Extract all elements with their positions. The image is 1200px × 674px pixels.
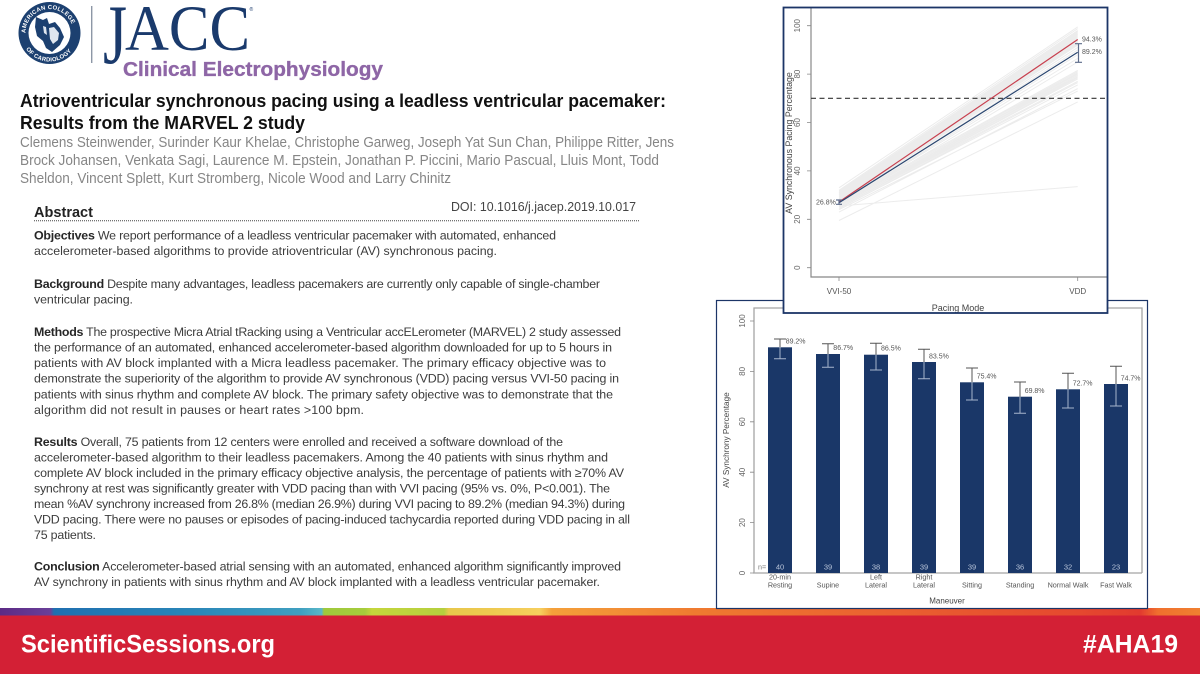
methods text: patients with sinus rhythm and complete AV block. The primary safety objective was to demonstrate that the (34, 387, 613, 401)
authors: Clemens Steinwender, Surinder Kaur Khelae, Christophe Garweg, Joseph Yat Sun Chan, Philippe Ritter, Jens (20, 135, 674, 151)
line chart y axis (784, 18, 1078, 281)
line chart x axis labels: Pacing Mode (932, 303, 984, 313)
maneuver labels (768, 572, 1132, 590)
mean line (839, 52, 1078, 203)
journal name: Clinical Electrophysiology (123, 59, 384, 81)
results text: synchrony at rest was significantly greater with VDD pacing than with VVI pacing (95% vs. 0%, P<0.001). The (34, 481, 610, 495)
sample size labels: 36 (1016, 562, 1024, 572)
abstract heading: Abstract (34, 204, 93, 221)
sample size labels: 39 (824, 562, 832, 572)
line value labels (816, 37, 1102, 207)
bar chart y axis: AV Synchrony Percentage (722, 392, 731, 488)
line chart x axis labels: VDD (1069, 287, 1086, 296)
line value labels: 89.2% (1082, 49, 1102, 56)
maneuver labels: Sitting (962, 580, 982, 590)
line value labels: 26.8% (816, 200, 836, 206)
line chart y axis: 60 (793, 118, 802, 127)
sample size labels: 40 (776, 562, 784, 572)
results text: Results Overall, 75 patients from 12 centers were enrolled and received a software download of the (34, 435, 563, 449)
bar value labels: 69.8% (1025, 388, 1045, 395)
results text (34, 435, 630, 542)
bar value labels: 72.7% (1073, 380, 1093, 388)
results text: 75 patients. (34, 528, 96, 542)
bar chart y axis: 100 (738, 314, 747, 328)
sample size labels: 39 (968, 562, 976, 572)
line chart y axis: 80 (793, 69, 802, 79)
authors: Sheldon, Vincent Splett, Kurt Stromberg, Nicole Wood and Larry Chinitz (20, 171, 451, 187)
line chart y axis: 40 (793, 166, 802, 175)
sample size labels: n= (758, 562, 766, 572)
bar chart x axis title: Maneuver (929, 596, 965, 606)
methods text (34, 325, 621, 417)
results text: accelerometer-based algorithm to their leadless pacemakers. Among the 40 patients with sinus rhythm and (34, 451, 608, 465)
conclusion text (34, 559, 621, 589)
background text (34, 277, 600, 306)
ACC seal logo: OF CARDIOLOGY (26, 48, 70, 62)
methods text: demonstrate the superiority of the algorithm to provide AV synchronous (VDD) pacing versus VVI-50 pacing in (34, 372, 619, 386)
authors: Brock Johansen, Venkata Sagi, Laurence M. Epstein, Jonathan P. Piccini, Mario Pascual, Lluis Mont, Todd (20, 153, 659, 169)
bar value labels: 74.7% (1121, 376, 1141, 382)
maneuver labels: Resting (768, 580, 792, 590)
article title: Results from the MARVEL 2 study (20, 113, 305, 133)
line chart y axis: AV Synchronous Pacing Percentage (784, 72, 794, 214)
error bars (836, 44, 1082, 204)
ACC seal logo: AMERICAN COLLEGE (22, 4, 76, 33)
median line (839, 40, 1078, 202)
line chart y axis: 100 (793, 18, 802, 32)
bars (768, 347, 1128, 573)
conclusion text: AV synchrony in patients with sinus rhythm and AV block implanted with a leadless ventricular pacemaker. (34, 575, 600, 589)
background text: Background Despite many advantages, leadless pacemakers are currently only capable of single-chamber (34, 277, 600, 291)
objectives text: accelerometer-based algorithms to provide atrioventricular (AV) synchronous pacing. (34, 244, 497, 258)
JACC wordmark: ® (250, 6, 254, 13)
methods text: the performance of an automated, enhanced accelerometer-based algorithm downloaded for up to 5 hours in (34, 340, 612, 354)
bar chart y axis: 60 (738, 417, 747, 426)
bar value labels: 83.5% (929, 354, 949, 360)
maneuver labels: Lateral (865, 580, 887, 590)
line chart y axis: 0 (793, 265, 802, 270)
70 percent threshold line (811, 97, 1107, 99)
bar value labels: 86.5% (881, 346, 901, 352)
error bars above bars (774, 339, 1122, 397)
methods text: Methods The prospective Micra Atrial tRacking using a Ventricular accELerometer (MARVEL) 2 study assessed (34, 325, 621, 339)
JACC wordmark (103, 0, 254, 82)
footer band (0, 608, 1200, 674)
methods text: algorithm did not result in pauses or heart rates >100 bpm. (34, 403, 364, 417)
footer website: ScientificSessions.org (21, 631, 275, 659)
bar value labels: 75.4% (977, 374, 997, 380)
maneuver labels: Supine (817, 580, 839, 590)
bar chart y axis (722, 314, 754, 575)
line chart y axis: 20 (793, 214, 802, 224)
sample size labels: 32 (1064, 562, 1072, 572)
bar value labels (786, 338, 1141, 395)
footer hashtag: #AHA19 (1083, 630, 1178, 658)
maneuver labels: Left (870, 572, 882, 582)
article title: Atrioventricular synchronous pacing using a leadless ventricular pacemaker: (20, 91, 666, 111)
results text: mean %AV synchrony increased from 26.8% (median 26.9%) during VVI pacing to 89.2% (median 94.3%) during (34, 497, 625, 511)
bar chart y axis: 80 (738, 366, 747, 376)
bar value labels: 86.7% (833, 345, 853, 352)
sample size labels: 39 (920, 562, 928, 572)
background text: ventricular pacing. (34, 292, 133, 306)
bar value labels: 89.2% (786, 338, 806, 346)
sample size labels: 38 (872, 562, 880, 572)
line chart x axis labels: VVI-50 (827, 287, 852, 296)
authors (20, 135, 674, 187)
panel: bar chart of AV synchrony by maneuver (716, 300, 1148, 608)
sample size labels: 23 (1112, 562, 1120, 572)
bar chart y axis: 20 (738, 518, 747, 527)
maneuver labels: Normal Walk (1048, 580, 1089, 590)
bar chart y axis: 40 (738, 467, 747, 477)
maneuver labels: Standing (1006, 580, 1034, 590)
results text: VDD pacing. There were no pauses or episodes of pacing-induced tachycardia reported during VDD pacing in all (34, 513, 630, 527)
article title (20, 91, 666, 133)
maneuver labels: Right (916, 572, 932, 582)
line chart x axis labels (827, 287, 1086, 313)
bar chart y axis: 0 (738, 570, 747, 575)
DOI: DOI: 10.1016/j.jacep.2019.10.017 (451, 200, 636, 214)
results text: complete AV block included in the primary efficacy objective analysis, the percentage of patients with ≥70% AV (34, 466, 625, 480)
patient lines (839, 27, 1078, 221)
objectives text (34, 228, 556, 258)
error bars inside bars (774, 347, 1122, 413)
maneuver labels: 20-min (769, 572, 791, 582)
maneuver labels: Lateral (913, 580, 935, 590)
line value labels: 94.3% (1082, 37, 1102, 44)
panel: line chart of pacing mode (784, 8, 1108, 313)
sample size labels (758, 562, 1120, 572)
objectives text: Objectives We report performance of a leadless ventricular pacemaker with automated, enhanced (34, 228, 556, 242)
ACC seal logo (18, 2, 80, 64)
conclusion text: Conclusion Accelerometer-based atrial sensing with an automated, enhanced algorithm significantly improved (34, 559, 621, 573)
maneuver labels: Fast Walk (1100, 580, 1132, 590)
methods text: patients with AV block implanted with a Micra leadless pacemaker. The primary efficacy objective was to (34, 356, 606, 370)
logo divider (91, 6, 92, 63)
